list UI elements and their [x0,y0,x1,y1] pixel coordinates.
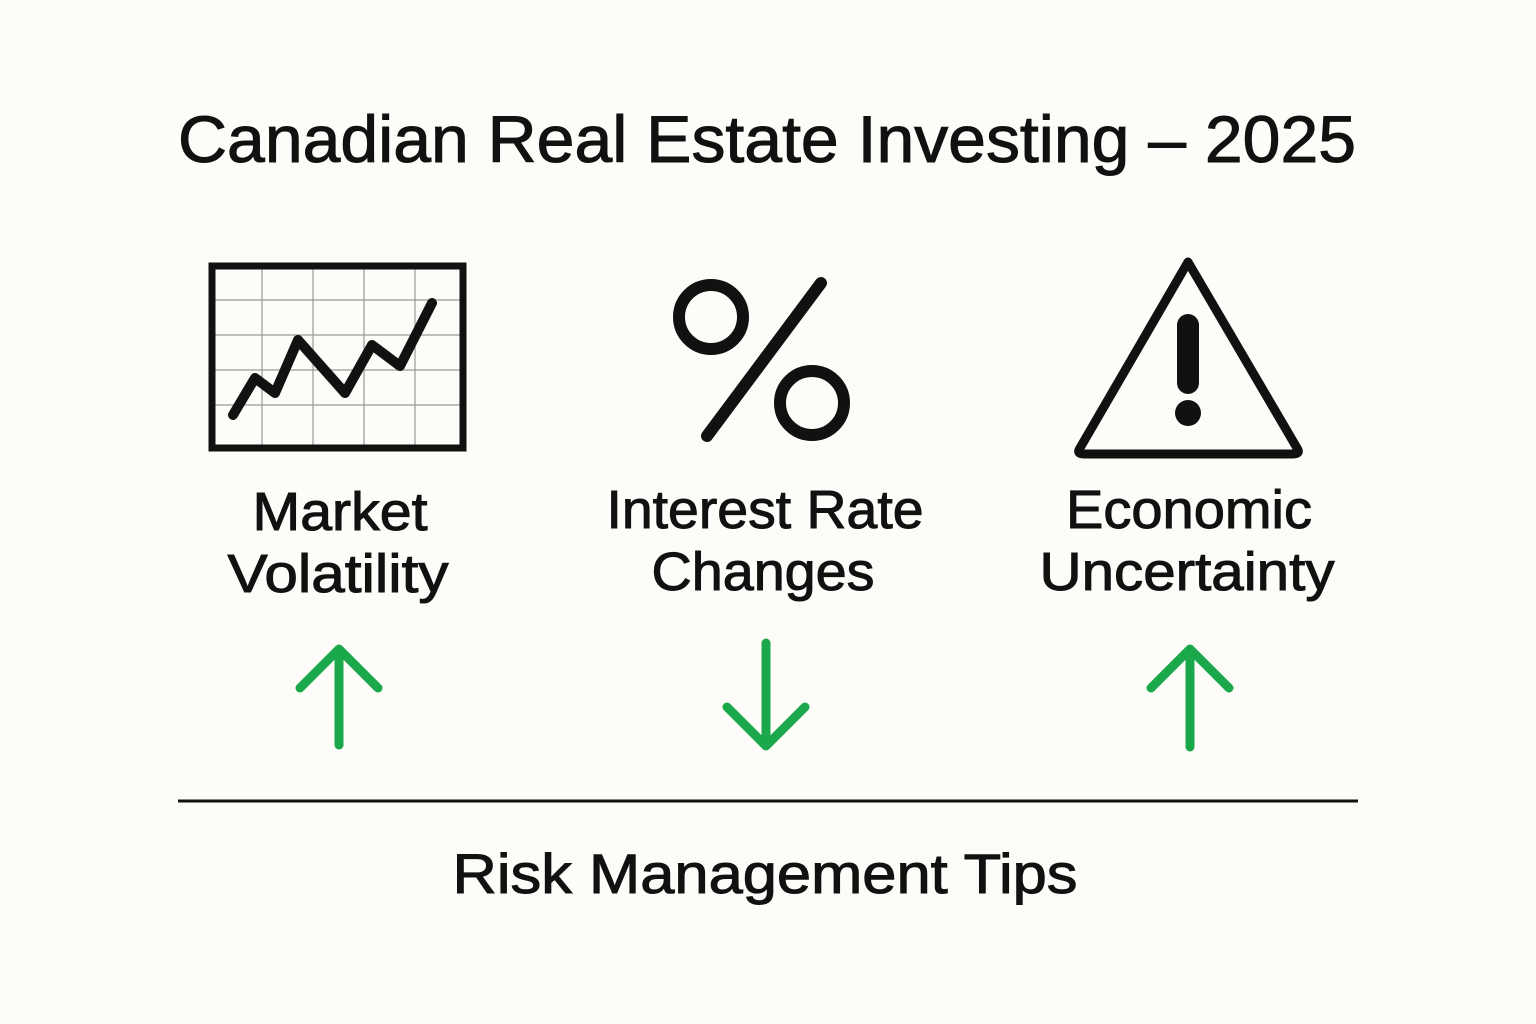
icon: warning [1079,262,1298,454]
icon: percent [679,283,844,436]
arrow: up [300,649,378,745]
label: market volatility: Market [252,482,428,542]
label: economic uncertainty: Economic [1066,480,1312,540]
arrow: down [727,643,805,746]
label: market volatility [228,482,448,604]
panel: economic uncertainty [1040,262,1334,747]
icon: line chart [212,266,463,448]
label: interest rate changes: Changes [652,542,874,602]
panel: interest rate changes [606,283,924,746]
label: economic uncertainty [1040,480,1334,602]
arrow: up [1151,649,1229,747]
label: interest rate changes [606,480,924,602]
label: market volatility: Volatility [228,544,448,604]
label: economic uncertainty: Uncertainty [1040,542,1334,602]
title: Canadian Real Estate Investing – 2025 [178,102,1356,176]
label: interest rate changes: Interest Rate [606,480,924,540]
subtitle: risk management tips: Risk Management Tips [452,842,1078,905]
panel: market volatility [212,266,463,745]
